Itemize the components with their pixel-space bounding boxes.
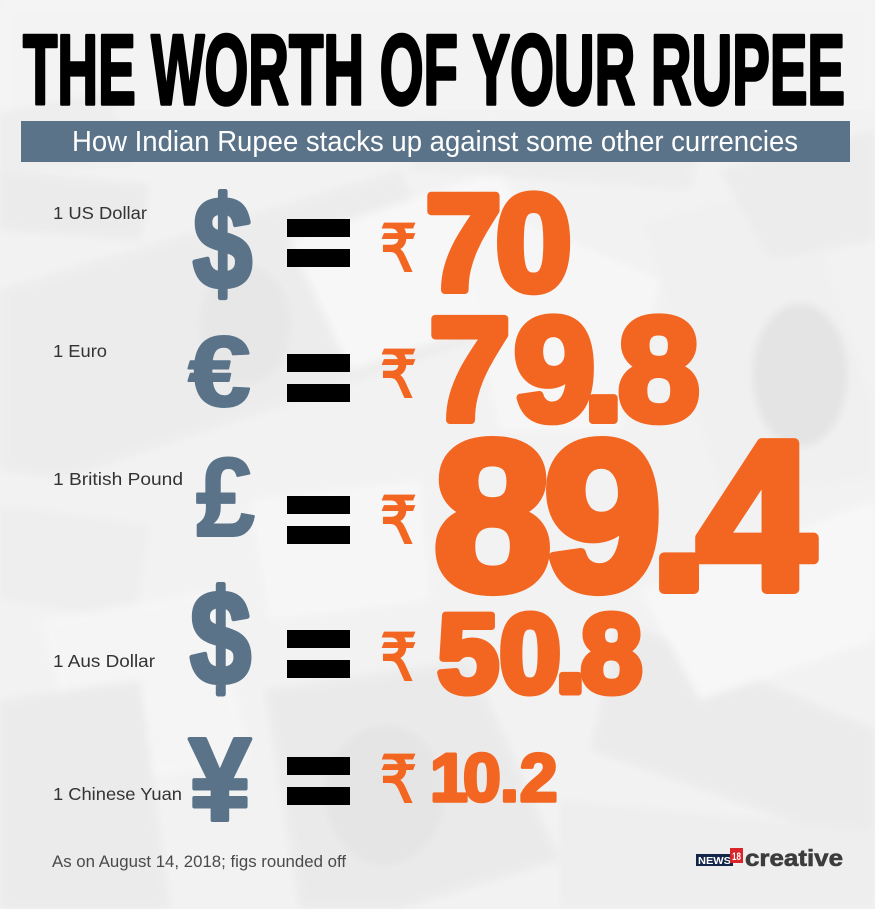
row: Euro: [53, 288, 700, 452]
row: US Dollar: [53, 167, 572, 320]
icon: pound: £: [196, 435, 255, 560]
value: 89.4: [434, 397, 815, 634]
icon: euro: €: [188, 316, 251, 428]
label: 1 British Pound: [53, 469, 183, 489]
value: 79.8: [429, 288, 700, 452]
row: Chinese Yuan: [53, 714, 558, 846]
logo: News18 Creative: [696, 845, 843, 871]
icon: dollar: $: [193, 170, 252, 316]
row: Aus Dollar: [53, 564, 642, 716]
value: 70: [425, 167, 572, 320]
equals sign: [287, 757, 350, 805]
logo: News18 Creative: creative: [745, 845, 843, 871]
subtitle band: How Indian Rupee stacks up against some other currencies: [72, 126, 798, 158]
equals sign: [287, 219, 350, 267]
label: 1 Aus Dollar: [53, 651, 155, 671]
equals sign: [287, 630, 350, 678]
rupee sign: ₹: [380, 621, 417, 694]
logo: News18 Creative: NEWS: [698, 855, 731, 867]
icon: dollar: $: [190, 564, 251, 713]
rupee sign: ₹: [380, 338, 417, 411]
label: 1 Euro: [53, 341, 107, 361]
value: 10.2: [430, 740, 558, 816]
icon: yuan: ¥: [189, 714, 251, 846]
equals sign: [287, 354, 350, 402]
label: 1 US Dollar: [53, 203, 147, 223]
equals sign: [287, 496, 350, 544]
logo: News18 Creative: 18: [732, 851, 741, 863]
rupee sign: ₹: [380, 212, 417, 285]
label: 1 Chinese Yuan: [53, 784, 182, 804]
rupee sign: ₹: [380, 484, 417, 557]
value: 50.8: [437, 592, 642, 716]
footnote: As on August 14, 2018; figs rounded off: [52, 852, 346, 871]
rupee sign: ₹: [380, 743, 417, 816]
row: British Pound: [53, 397, 815, 634]
